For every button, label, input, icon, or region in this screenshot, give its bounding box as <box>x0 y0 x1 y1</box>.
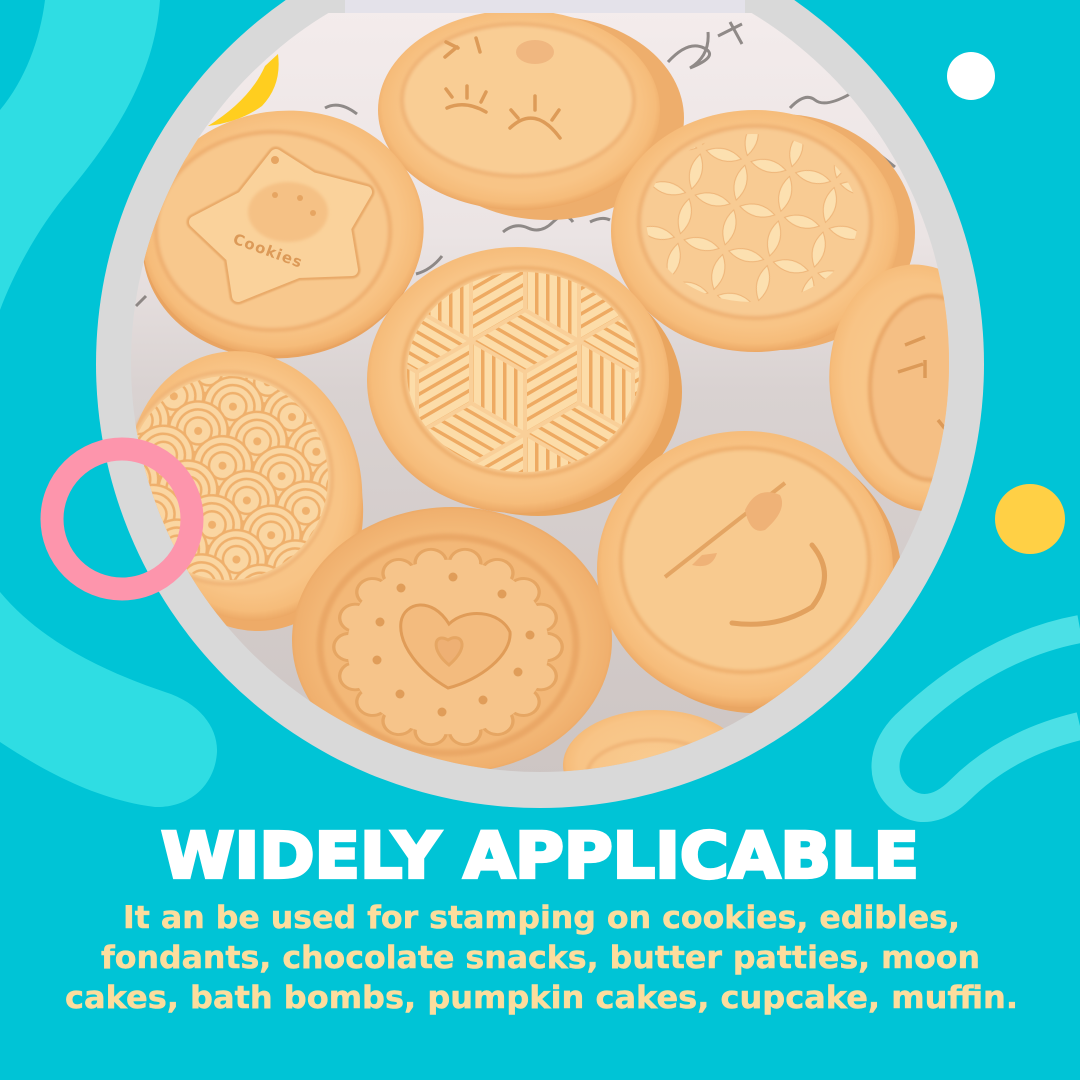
cookie: right edge <box>829 264 949 511</box>
yellow object behind cookies <box>208 54 279 126</box>
description line 2: fondants, chocolate snacks, butter patties, moon <box>101 940 980 976</box>
grey circular frame <box>96 0 984 808</box>
paper backdrop <box>120 0 960 780</box>
cookie: seigaiha waves <box>136 351 364 631</box>
cookie: heart <box>292 507 612 773</box>
cookie: lattice <box>611 110 915 352</box>
lavender strip at top of frame <box>345 0 745 13</box>
cookie: star <box>144 110 424 358</box>
icon: white dot <box>947 52 995 100</box>
decorative loop: bottom right <box>885 629 1080 808</box>
decorative blob: top left <box>0 0 160 310</box>
decorative blob: bottom left <box>0 592 217 807</box>
description text <box>65 900 1018 1016</box>
photo: stamped cookies <box>133 13 949 772</box>
cookie: bottom partial <box>563 710 724 772</box>
pink ring <box>52 449 192 589</box>
stamped word on star: Cookies <box>231 230 305 271</box>
cookie: smile <box>597 431 900 714</box>
description line 1: It an be used for stamping on cookies, edibles, <box>123 900 960 936</box>
title: WIDELY APPLICABLE <box>161 820 919 892</box>
description line 3: cakes, bath bombs, pumpkin cakes, cupcake, muffin. <box>65 980 1018 1016</box>
icon: yellow dot <box>995 484 1065 554</box>
cookie: hexagon hatch <box>367 247 682 516</box>
cookie: eyes and sun lashes <box>378 10 684 220</box>
handwriting on paper <box>136 22 895 306</box>
